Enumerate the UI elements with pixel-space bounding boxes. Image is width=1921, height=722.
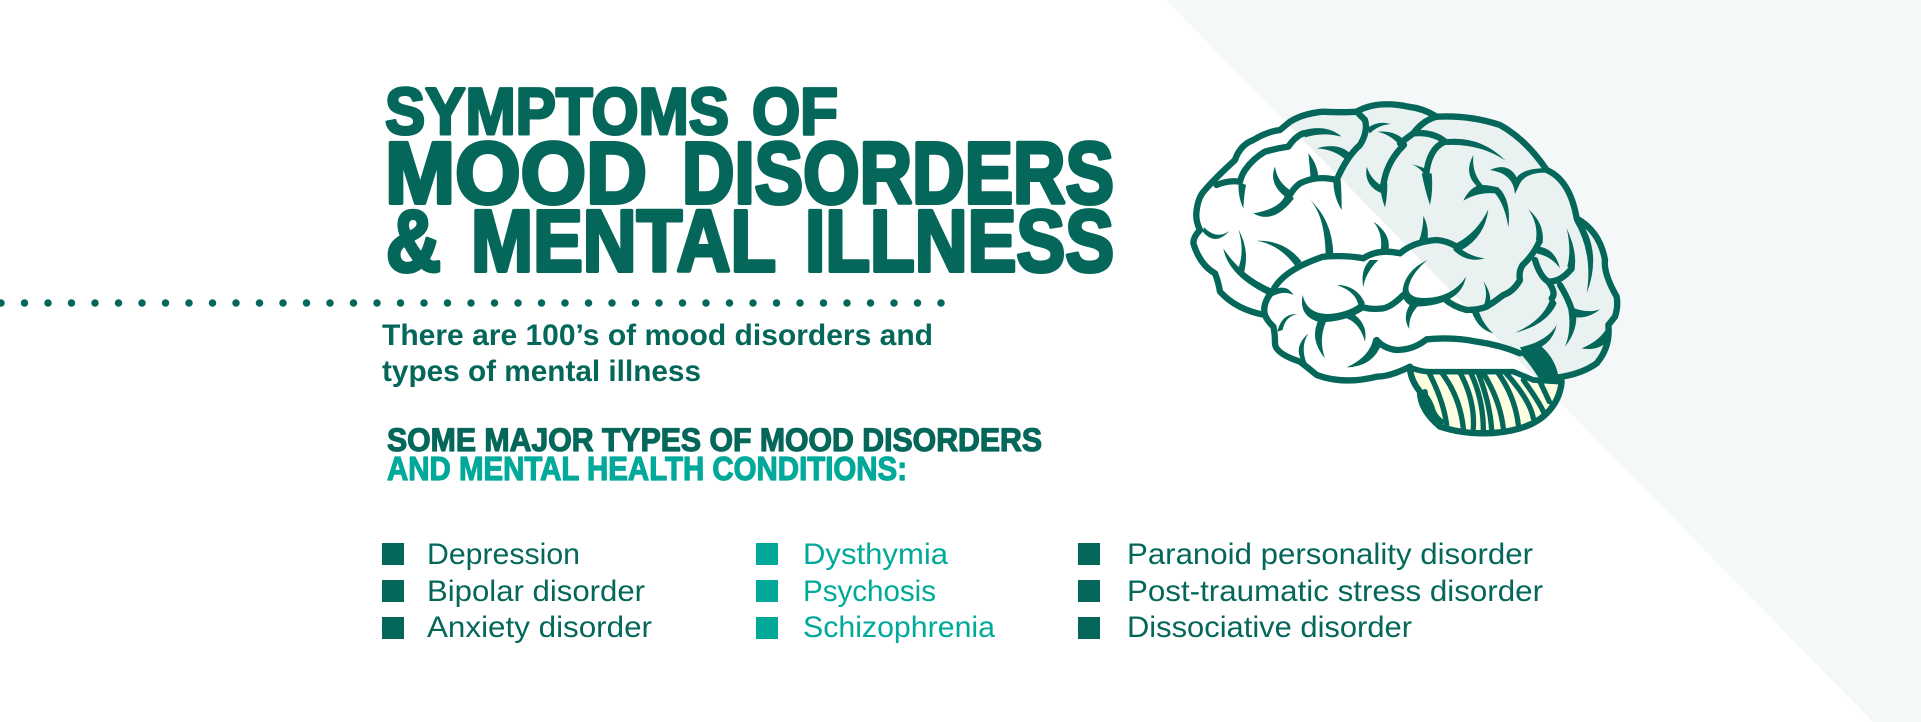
list column 1: Bipolar disorder <box>427 575 645 608</box>
intro text <box>382 319 933 388</box>
folds: tapered creases <box>1203 123 1610 367</box>
title: SYMPTOMS <box>385 74 729 148</box>
cerebrum outline and folds <box>1193 104 1617 382</box>
title: MENTAL <box>471 193 776 290</box>
title: OF <box>752 74 838 148</box>
title: DISORDERS <box>682 125 1114 222</box>
list column 2: Dysthymia <box>803 538 948 571</box>
list column 1: Anxiety disorder <box>427 611 652 644</box>
title: & <box>386 193 441 290</box>
list column 2: Psychosis <box>803 575 936 608</box>
cerebrum fill <box>1290 108 1614 378</box>
title <box>385 74 1114 290</box>
title: ILLNESS <box>805 193 1114 290</box>
list column 3: Post-traumatic stress disorder <box>1127 575 1543 608</box>
cerebellum <box>1410 368 1562 433</box>
dotted divider <box>1 299 942 307</box>
icon: brain <box>1193 104 1617 433</box>
subheading <box>387 422 1042 487</box>
list column 3: Dissociative disorder <box>1127 611 1412 644</box>
intro text: There are 100’s of mood disorders and <box>382 319 933 352</box>
list column 1: Depression <box>427 538 580 571</box>
background triangle <box>1166 0 1921 722</box>
subheading: SOME MAJOR TYPES OF MOOD DISORDERS <box>387 422 1042 458</box>
intro text: types of mental illness <box>382 355 701 388</box>
list column 3 <box>1078 538 1543 644</box>
brain stem wedge <box>1520 347 1559 380</box>
list column 2: Schizophrenia <box>803 611 995 644</box>
title: MOOD <box>385 125 647 222</box>
list column 2 <box>756 538 995 644</box>
list column 3: Paranoid personality disorder <box>1127 538 1533 571</box>
subheading: AND MENTAL HEALTH CONDITIONS: <box>387 450 907 487</box>
list column 1 <box>382 538 652 644</box>
